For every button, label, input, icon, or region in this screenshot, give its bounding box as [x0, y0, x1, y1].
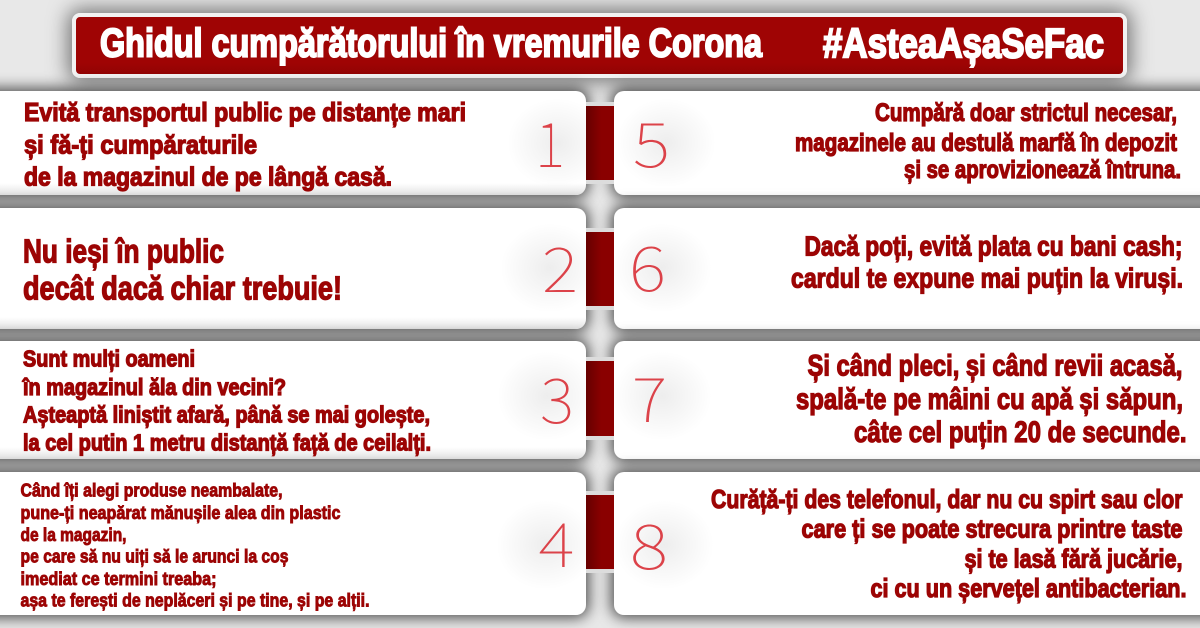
number 6: 6: [629, 219, 666, 309]
tip 2 text: decât dacă chiar trebuie!: [23, 270, 342, 306]
panel: tip 2: [0, 208, 586, 329]
tip 3 text: Sunt mulți oameni: [23, 346, 195, 372]
tip 2 text: Nu ieși în public: [23, 232, 224, 270]
panel: banner: [72, 13, 1127, 78]
tip 4 text: [20, 480, 370, 610]
tip 1 text: de la magazinul de pe lângă casă.: [24, 162, 392, 192]
tip 3 text: [22, 346, 431, 456]
number 3: 3: [540, 351, 574, 441]
tip 4 text: Când îți alegi produse neambalate,: [20, 480, 282, 500]
tip 4 text: așa te ferești de neplăceri și pe tine, și pe alții.: [20, 590, 370, 610]
panel: tip 6: [614, 208, 1200, 329]
tip 3 text: în magazinul ăla din vecini?: [22, 374, 286, 400]
tip 1 text: Evită transportul public pe distanțe mari: [24, 97, 466, 127]
number 1: 1: [535, 95, 565, 185]
tip 8 text: [711, 484, 1186, 603]
tip 1 text: [24, 97, 466, 192]
connector strip 1-5: [586, 102, 614, 184]
tip 7 text: [796, 350, 1186, 449]
tip 1 text: și fă-ți cumpăraturile: [24, 130, 257, 160]
panel: tip 1: [0, 91, 586, 195]
tip 6 text: [791, 230, 1183, 294]
number 8: 8: [630, 497, 668, 587]
panel: tip 5: [614, 91, 1200, 195]
tip 5 text: [795, 99, 1181, 184]
connector strip 4-8: [586, 491, 614, 573]
number 7: 7: [632, 350, 667, 440]
tip 4 text: imediat ce termini treaba;: [20, 569, 216, 589]
tip 4 text: de la magazin,: [20, 525, 126, 545]
panel: tip 3: [0, 341, 586, 459]
connector strip 3-7: [586, 357, 614, 440]
number 4: 4: [538, 495, 574, 585]
panel: tip 4: [0, 472, 586, 615]
number 2: 2: [542, 220, 578, 310]
tip 4 text: pe care să nu uiți să le arunci la coș: [20, 546, 288, 566]
tip 4 text: pune-ți neapărat mănușile alea din plastic: [20, 503, 340, 523]
tip 3 text: Așteaptă liniștit afară, până se mai golește,: [23, 402, 430, 428]
panel: tip 7: [614, 341, 1200, 459]
title: Ghidul cumpărătorului în vremurile Corona: [100, 22, 763, 66]
tip 2 text: [23, 232, 342, 306]
connector strip 2-6: [586, 228, 614, 310]
tip 3 text: la cel putin 1 metru distanță față de ceilalți.: [23, 430, 431, 456]
number 5: 5: [633, 95, 670, 185]
panel: tip 8: [614, 472, 1200, 615]
hashtag: #AsteaAșaSeFac: [823, 20, 1104, 68]
